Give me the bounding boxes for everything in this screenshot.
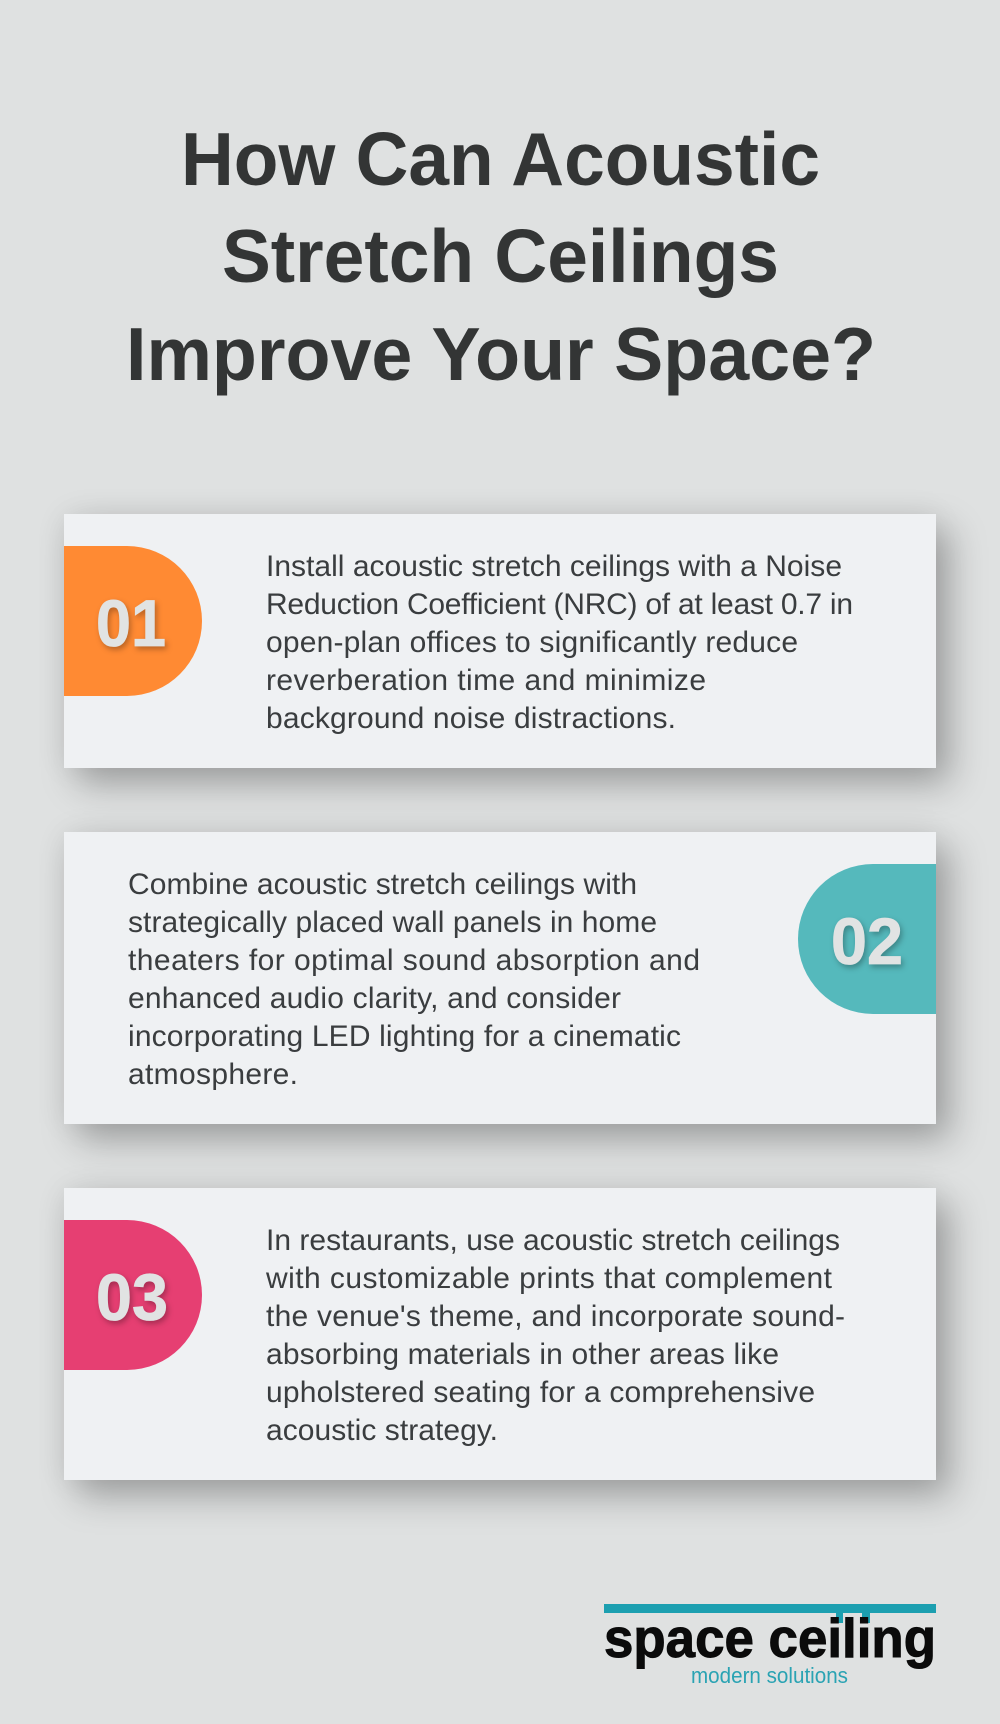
text: tip 1: open-plan offices to significantly reduce	[266, 626, 798, 659]
text: tip 3	[265, 1224, 845, 1447]
text: tip 2	[128, 868, 700, 1091]
text: tip 2: enhanced audio clarity, and consider	[128, 982, 621, 1015]
badge: 02: 02	[831, 904, 903, 978]
logo: space ceiling: space ceiling	[604, 1607, 936, 1669]
badge: 03	[64, 1220, 202, 1370]
text: tip 2: incorporating LED lighting for a cinematic	[128, 1020, 681, 1053]
badge: 01: 01	[96, 586, 166, 660]
text: tip 1: Reduction Coefficient (NRC) of at least 0.7 in	[266, 588, 853, 621]
text: tip 2: Combine acoustic stretch ceilings with	[128, 868, 637, 901]
text: tip 3: upholstered seating for a comprehensive	[266, 1376, 815, 1409]
title: Improve Your Space?	[126, 312, 876, 396]
panel: tip 1	[64, 514, 936, 768]
badge: 02	[798, 864, 936, 1014]
text: tip 1	[266, 550, 853, 735]
text: tip 3: the venue's theme, and incorporate sound-	[266, 1300, 845, 1333]
text: tip 1: Install acoustic stretch ceilings with a Noise	[266, 550, 842, 583]
text: tip 3: with customizable prints that complement	[265, 1262, 833, 1295]
badge: 01	[64, 546, 202, 696]
title: How Can Acoustic	[181, 117, 820, 201]
text: tip 3: acoustic strategy.	[266, 1414, 498, 1447]
text: tip 2: atmosphere.	[128, 1058, 298, 1091]
logo: space ceiling: modern solutions	[691, 1663, 848, 1688]
text: tip 2: theaters for optimal sound absorption and	[128, 944, 700, 977]
text: tip 1: reverberation time and minimize	[266, 664, 706, 697]
text: tip 3: In restaurants, use acoustic stretch ceilings	[266, 1224, 840, 1257]
text: tip 3: absorbing materials in other areas like	[266, 1338, 779, 1371]
title: Stretch Ceilings	[222, 214, 779, 298]
panel: tip 2	[64, 832, 936, 1124]
badge: 03: 03	[96, 1260, 168, 1334]
text: tip 1: background noise distractions.	[266, 702, 676, 735]
panel: tip 3	[64, 1188, 936, 1480]
title	[126, 117, 876, 396]
text: tip 2: strategically placed wall panels in home	[128, 906, 657, 939]
